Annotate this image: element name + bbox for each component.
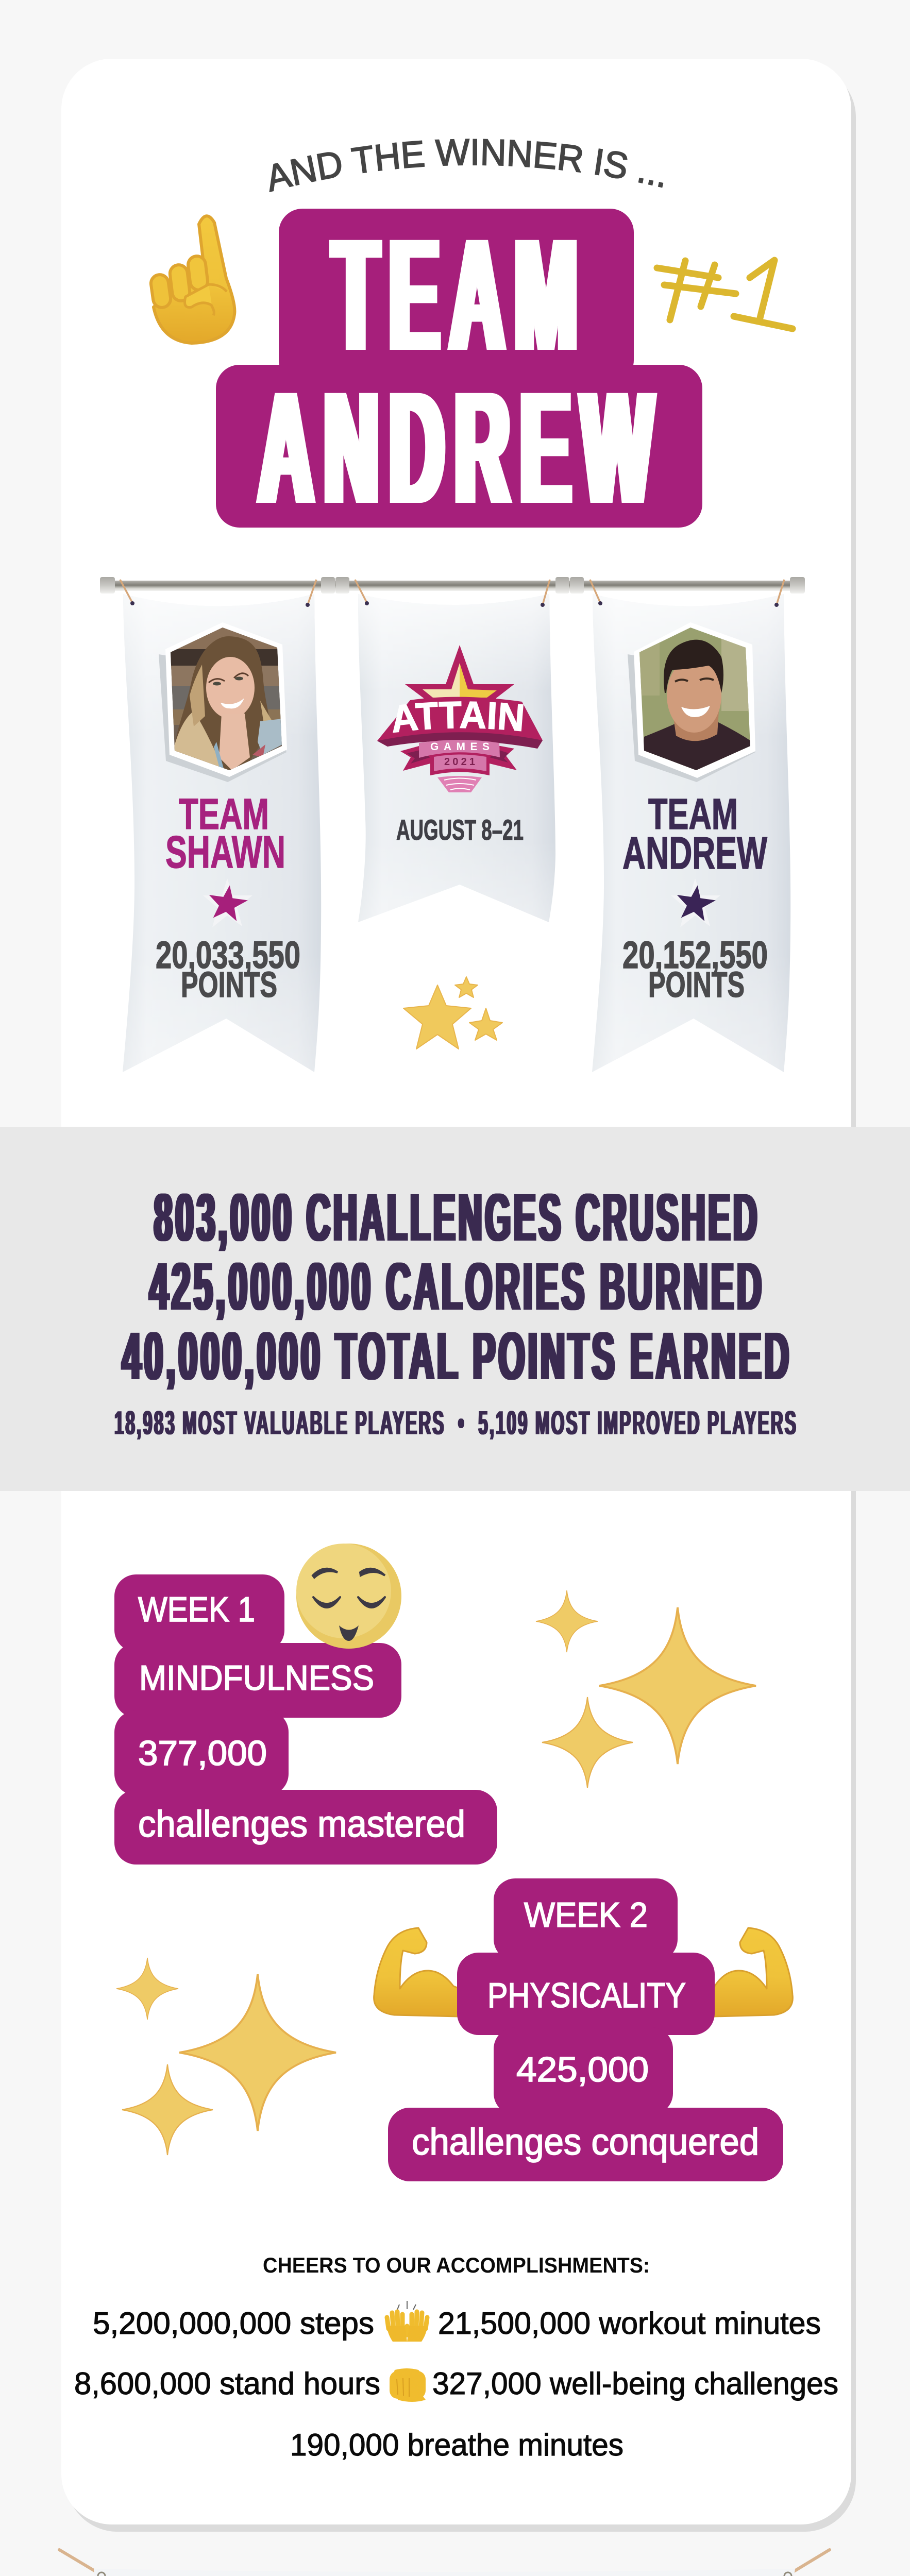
- logo: attain games 2021: GAMES: [430, 741, 490, 753]
- logo: attain games 2021: ATTAIN: [393, 701, 524, 733]
- panel: week 2 physicality: challenges conquered: [412, 2122, 759, 2163]
- icon: magenta star: [203, 878, 252, 927]
- points: shawn: POINTS: [181, 964, 277, 1005]
- curtain rod: [100, 577, 805, 594]
- icon: sparkles top right: [536, 1590, 756, 1788]
- panel: team andrew banner: [590, 580, 790, 1072]
- team name: andrew: ANDREW: [622, 827, 767, 878]
- team name: shawn: SHAWN: [165, 826, 285, 877]
- points: andrew: [622, 934, 768, 1005]
- panel: attain games banner: [355, 579, 555, 922]
- icon: three gold stars: [403, 977, 502, 1049]
- panel: tips banner: [59, 2550, 830, 2576]
- text block: accomplishments list: [74, 2306, 838, 2462]
- week 1 labels: MINDFULNESS: [139, 1658, 374, 1698]
- photo: andrew in hexagon frame: [628, 622, 757, 782]
- text block: accomplishments list: 21,500,000 workout minutes: [438, 2306, 821, 2341]
- points: andrew: 20,152,550: [622, 934, 768, 976]
- points: shawn: 20,033,550: [156, 934, 300, 976]
- team name: shawn: [165, 790, 285, 877]
- panel: week 2 physicality: WEEK 2: [524, 1895, 648, 1935]
- panel: week 2 physicality: [388, 1878, 783, 2181]
- week 1 labels: WEEK 1: [138, 1590, 255, 1629]
- text block: accomplishments list: 190,000 breathe minutes: [290, 2428, 623, 2462]
- icon: sparkles left: [116, 1958, 336, 2155]
- icon: pointing up hand: [150, 216, 234, 343]
- icon: purple star: [671, 878, 720, 927]
- week 1 labels: [138, 1590, 465, 1845]
- text block: accomplishments list: 8,600,000 stand hours: [74, 2366, 380, 2401]
- team name: andrew: [622, 790, 767, 878]
- panel: week 1 mindfulness: [114, 1544, 497, 1865]
- icon: calm face: [296, 1544, 401, 1649]
- photo: shawn in hexagon frame: [159, 622, 289, 782]
- team name: shawn: TEAM: [179, 790, 269, 838]
- points: andrew: POINTS: [648, 964, 745, 1005]
- logo: attain games 2021: [377, 645, 543, 792]
- panel: week 2 physicality: 425,000: [516, 2050, 649, 2089]
- team name: andrew: TEAM: [648, 790, 738, 838]
- heading: cheers to our accomplishments: CHEERS TO OUR ACCOMPLISHMENTS:: [263, 2253, 650, 2277]
- week 1 labels: 377,000: [138, 1734, 267, 1773]
- curved heading: and the winner is: AND THE WINNER IS ...: [269, 139, 664, 193]
- logo: attain games 2021: 2021: [444, 756, 475, 768]
- panel: team shawn banner: [120, 580, 321, 1072]
- winner title: team andrew: [216, 205, 702, 537]
- icon: raised hands: [387, 2301, 427, 2342]
- text block: accomplishments list: 327,000 well-being challenges: [432, 2366, 838, 2401]
- panel: week 2 physicality: PHYSICALITY: [487, 1976, 686, 2015]
- winner title: team andrew: TEAM: [333, 205, 588, 384]
- text block: accomplishments list: 5,200,000,000 steps: [93, 2306, 374, 2341]
- panel: totals band: [0, 1127, 910, 1491]
- hand-drawn number one: [657, 260, 793, 329]
- points: shawn: [156, 934, 300, 1005]
- icon: fist bump: [390, 2368, 426, 2402]
- icon: flexed biceps: [374, 1928, 793, 2016]
- week 1 labels: challenges mastered: [138, 1804, 465, 1845]
- dates: august 8-21: AUGUST 8–21: [396, 814, 524, 846]
